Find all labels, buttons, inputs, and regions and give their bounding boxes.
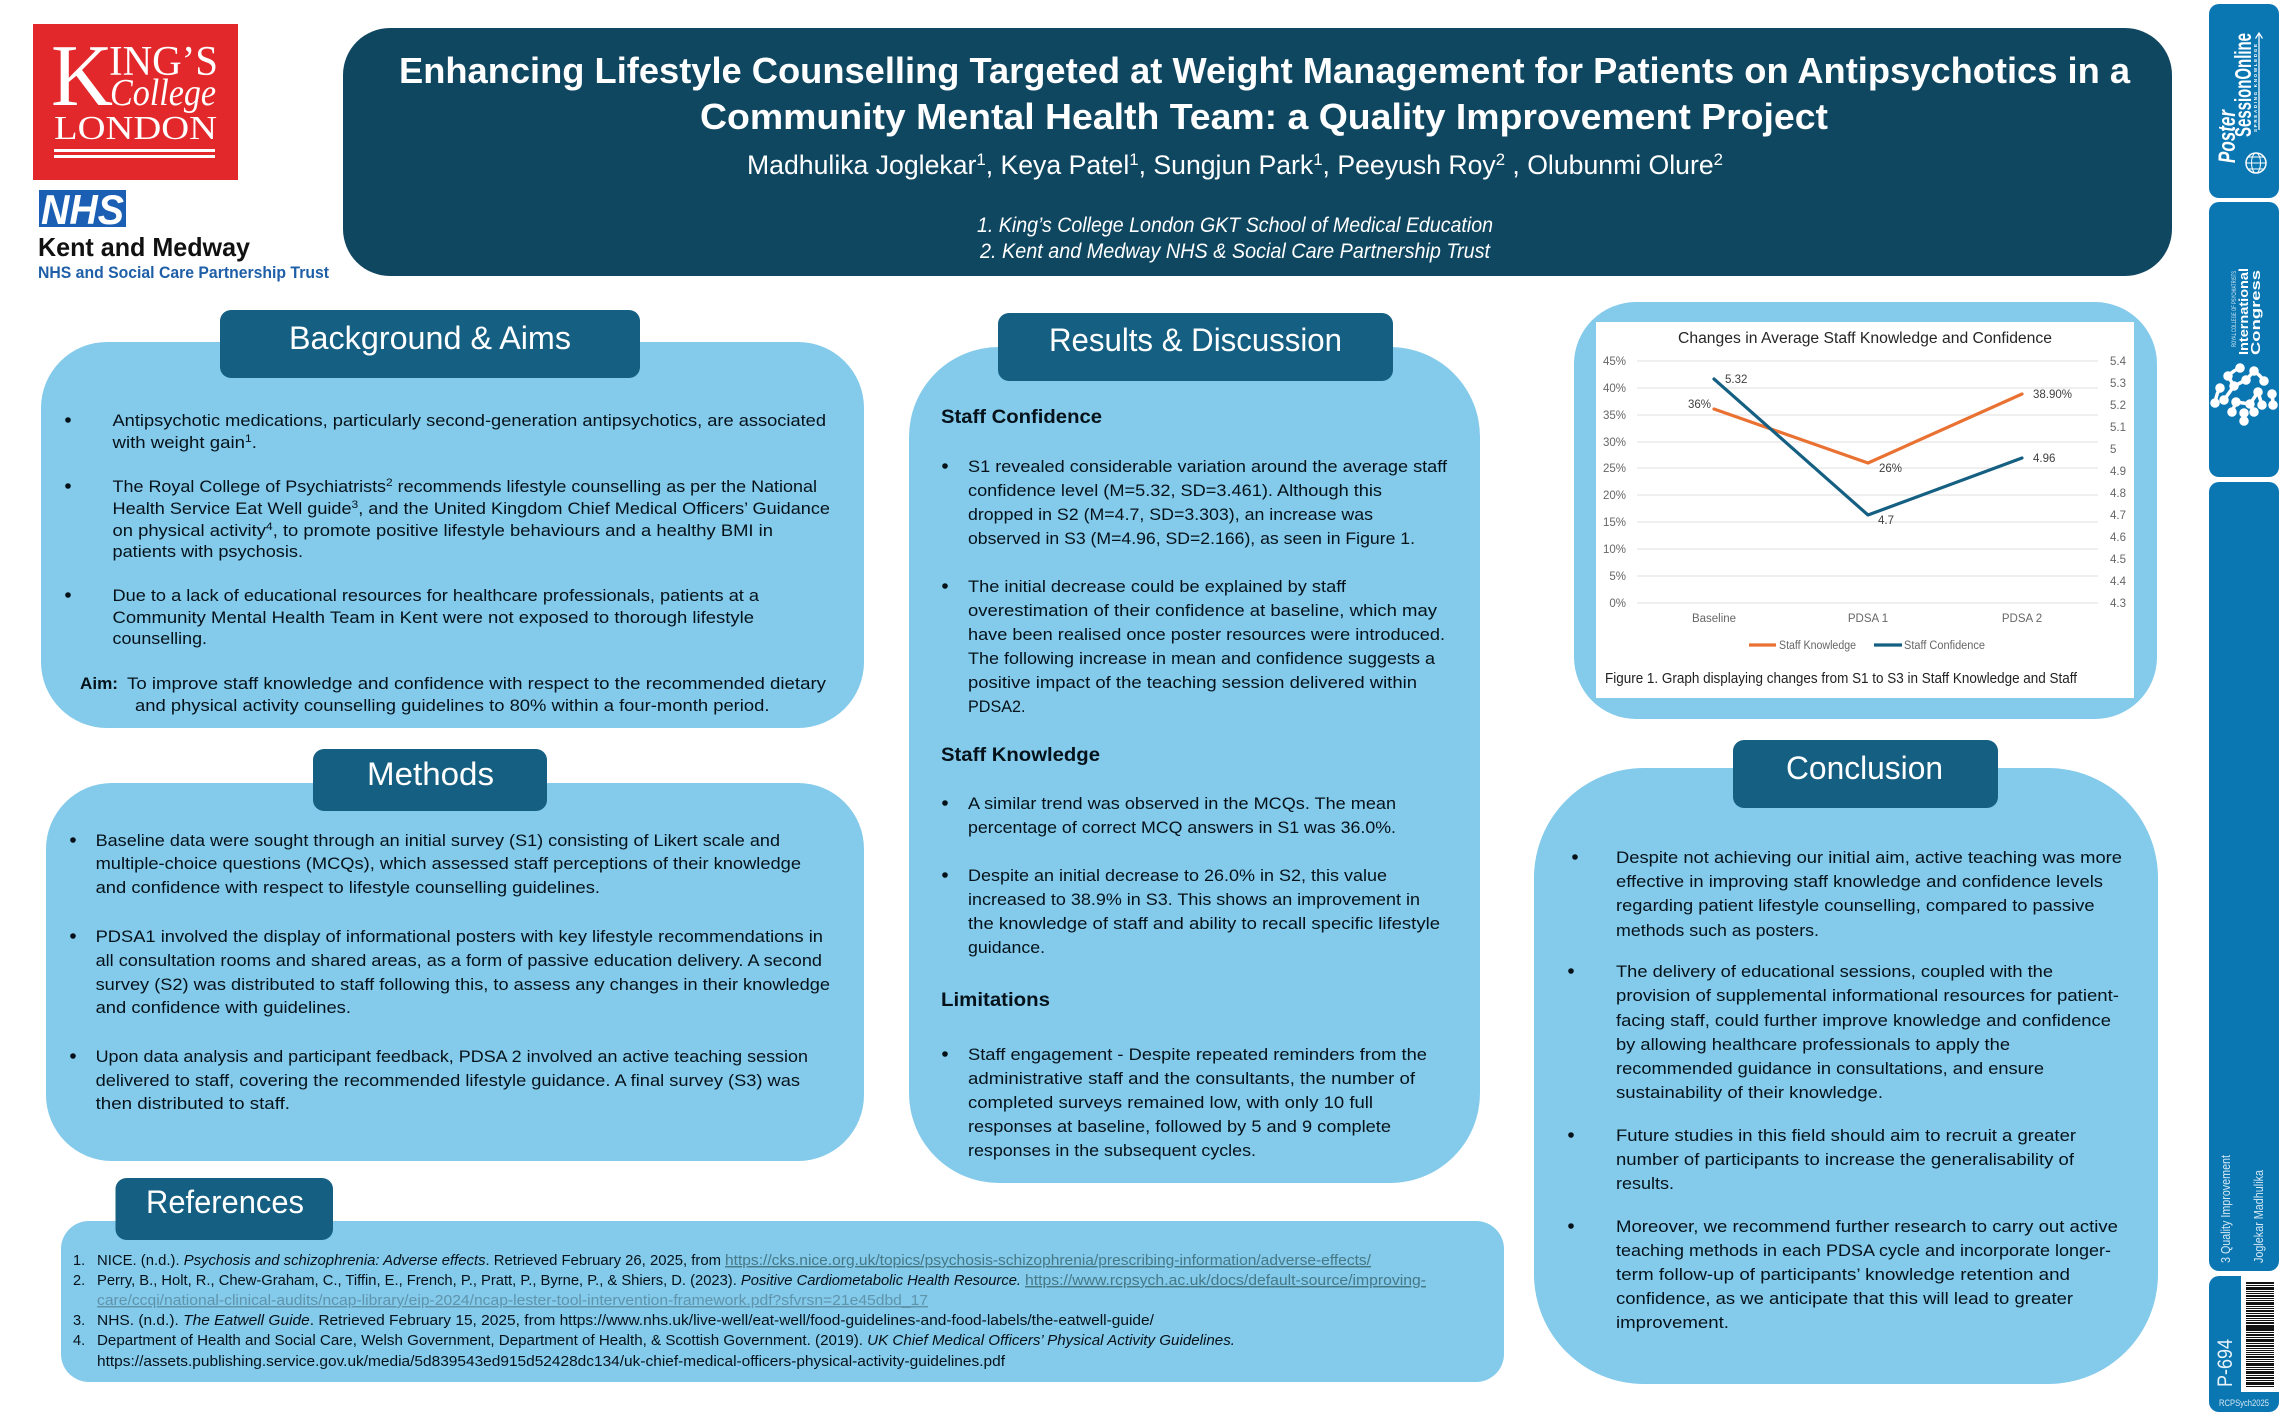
bullet: initial decrease: The initial decrease could be explained by staff (968, 577, 1346, 596)
right axis labels: 5.2 (2110, 400, 2126, 412)
bullet: further research: Moreover, we recommend further research to carry out active (1616, 1217, 2118, 1236)
bullet: knowledge increase: the knowledge of staff and ability to recall specific lifestyle (968, 914, 1440, 933)
bullet: staff engagement: completed surveys remained low, with only 10 full (968, 1093, 1373, 1112)
heading: Results & Discussion: Results & Discussion (1049, 322, 1342, 358)
bullet: weight gain: Antipsychotic medications, particularly second-generation antipsychotics, are associated (112, 411, 826, 430)
sidebar (2209, 4, 2283, 1412)
bullet: initial decrease: The following increase in mean and confidence suggests a (968, 649, 1436, 668)
sidebar: poster ID and barcode: RCPSych2025 (2219, 1398, 2269, 1409)
right axis labels: 4.3 (2110, 598, 2126, 610)
bullet: knowledge increase: guidance. (968, 938, 1045, 957)
authors: Madhulika Joglekar (747, 150, 980, 180)
poster title: Community Mental Health Team: a Quality Improvement Project (700, 96, 1828, 137)
heading: References: References (146, 1184, 304, 1220)
line chart (1603, 356, 2127, 652)
bullet: lack of resources: counselling. (112, 629, 207, 648)
heading: Background & Aims: Background & Aims (289, 320, 571, 356)
bullet: further research: improvement. (1616, 1313, 1729, 1332)
bullet: active teaching: Despite not achieving our initial aim, active teaching was more (1616, 848, 2122, 867)
bullet: guidance: , to promote positive lifestyle behaviours and a healthy BMI in (273, 521, 773, 540)
right axis labels: 4.9 (2110, 466, 2126, 478)
panel: Conclusion (1534, 740, 2158, 1384)
bullet: further research: teaching methods in each PDSA cycle and incorporate longer- (1616, 1241, 2111, 1260)
sidebar: International Congress: Congress (2249, 270, 2263, 355)
bullet: initial decrease (942, 577, 1445, 716)
authors: 2 (1714, 150, 1723, 169)
bullet: S1 variation: dropped in S2 (M=4.7, SD=3.303), an increase was (968, 505, 1373, 524)
bullet: future studies: results. (1616, 1174, 1674, 1193)
right axis labels: 4.7 (2110, 510, 2126, 522)
bullet: PDSA 2: delivered to staff, covering the recommended lifestyle guidance. A final survey (S3) was (96, 1071, 800, 1090)
heading: Results & Discussion (998, 313, 1393, 381)
bullet: staff engagement: responses in the subsequent cycles. (968, 1141, 1256, 1160)
barcode (2246, 1282, 2274, 1387)
right axis labels: 5.3 (2110, 378, 2126, 390)
affiliations (977, 214, 1493, 263)
authors: , Olubunmi Olure (1505, 150, 1714, 180)
data labels: 26% (1879, 463, 1902, 475)
reference list: NHS. (n.d.). The Eatwell Guide . Retrieved February 15, 2025, from https://www.nhs.uk/live-well/eat-well/food-guidelines-and-food-labels/the-eatwell-guide/ (97, 1313, 1155, 1329)
data labels: 5.32 (1725, 374, 1747, 386)
authors: , Sungjun Park (1139, 150, 1314, 180)
left axis labels: 45% (1603, 356, 1626, 368)
heading: Conclusion (1733, 740, 1998, 808)
panel: References (61, 1178, 1504, 1382)
bullet: guidance: The Royal College of Psychiatrists (112, 477, 365, 496)
left axis labels: 5% (1609, 571, 1626, 583)
category labels: Baseline (1692, 613, 1736, 625)
left axis labels: 35% (1603, 410, 1626, 422)
bullet: weight gain: with weight gain (112, 433, 231, 452)
bullet: staff engagement: responses at baseline, followed by 5 and 9 complete (968, 1117, 1391, 1136)
bullet: MCQ trend (942, 794, 1396, 837)
reference list: 4. (73, 1333, 85, 1349)
logo: King's College London: K (51, 28, 113, 125)
poster title: Enhancing Lifestyle Counselling Targeted at Weight Management for Patients on Antipsychotics in a (399, 50, 2131, 91)
icon: brain network (2212, 365, 2276, 424)
aim statement: and physical activity counselling guidelines to 80% within a four-month period. (135, 696, 770, 715)
sidebar: International Congress: ROYAL COLLEGE OF PSYCHIATRISTS (2231, 271, 2238, 347)
bullet: further research: term follow-up of participants’ knowledge retention and (1616, 1265, 2070, 1284)
bullet: PDSA1: PDSA1 involved the display of informational posters with key lifestyle recommendations in (96, 927, 823, 946)
bullet: baseline survey: multiple-choice questions (MCQs), which assessed staff perceptions of their knowledge (96, 854, 801, 873)
bullet: initial decrease: positive impact of the teaching session delivered within (968, 673, 1417, 692)
bullet: S1 variation: observed in S3 (M=4.96, SD=2.166), as seen in Figure 1. (968, 529, 1415, 548)
bullet: knowledge increase: Despite an initial decrease to 26.0% in S2, this value (968, 866, 1387, 885)
right axis labels: 4.8 (2110, 488, 2126, 500)
subheading: Staff Knowledge: Staff Knowledge (941, 745, 1100, 766)
bullet: guidance: 2 (386, 477, 393, 489)
bullet: MCQ trend: percentage of correct MCQ answers in S1 was 36.0%. (968, 818, 1396, 837)
legend: Staff Confidence (1904, 640, 1985, 652)
bullet: baseline survey (70, 831, 801, 897)
panel: Methods (46, 749, 864, 1161)
logo: NHS Kent and Medway (38, 186, 329, 282)
left axis labels: 10% (1603, 544, 1626, 556)
left axis labels (1603, 356, 1626, 610)
left axis labels: 20% (1603, 490, 1626, 502)
aim statement (80, 674, 827, 715)
sidebar: poster ID and barcode: P-694 (2214, 1339, 2237, 1387)
sidebar: Poster Session Online (2209, 4, 2279, 198)
series: staff knowledge (1714, 394, 2022, 463)
left axis labels: 30% (1603, 437, 1626, 449)
bullet: PDSA 2 (70, 1047, 808, 1113)
bullet: further research (1568, 1217, 2118, 1332)
bullet: active teaching: regarding patient lifestyle counselling, compared to passive (1616, 896, 2094, 915)
bullet: weight gain: . (252, 433, 257, 452)
data labels: 4.7 (1878, 515, 1894, 527)
affiliations: 1. King’s College London GKT School of Medical Education (977, 214, 1493, 237)
left axis labels: 25% (1603, 463, 1626, 475)
logo: King's College London: ING’S (109, 39, 218, 85)
category labels: PDSA 2 (2002, 613, 2042, 625)
data labels: 4.96 (2033, 453, 2055, 465)
bullet: PDSA 2: Upon data analysis and participant feedback, PDSA 2 involved an active teaching session (96, 1047, 808, 1066)
right axis labels: 5 (2110, 444, 2116, 456)
authors: 1 (1129, 150, 1139, 169)
panel: chart card (1574, 302, 2157, 719)
logo: NHS Kent and Medway: NHS and Social Care Partnership Trust (38, 263, 329, 282)
bullet: active teaching: effective in improving staff knowledge and confidence levels (1616, 872, 2103, 891)
sidebar: poster ID and barcode (2209, 1276, 2283, 1412)
left axis labels: 40% (1603, 383, 1626, 395)
left axis labels: 15% (1603, 517, 1626, 529)
affiliations: 2. Kent and Medway NHS & Social Care Partnership Trust (979, 240, 1491, 263)
authors: 2 (1496, 150, 1505, 169)
reference list: https://assets.publishing.service.gov.uk/media/5d839543ed915d52428dc134/uk-chief-medical-officers-physical-activity-guidelines.pdf (97, 1354, 1006, 1370)
bullet: lack of resources: Due to a lack of educational resources for healthcare professionals, patients at a (112, 586, 760, 605)
reference list: Department of Health and Social Care, Welsh Government, Department of Health, & Scottish Government. (2019). UK Chief Medical Officers’ Physical Activity Guidelines. (97, 1333, 1235, 1349)
logo: King's College London: LONDON (54, 110, 217, 147)
bullet: educational sessions: by allowing healthcare professionals to apply the (1616, 1035, 2010, 1054)
bullet: guidance (65, 477, 830, 561)
bullet: guidance: patients with psychosis. (112, 542, 303, 561)
sidebar: Poster Session Online: Poster (2214, 109, 2241, 163)
right axis labels: 4.5 (2110, 554, 2126, 566)
sidebar: topic and author: Joglekar Madhulika (2252, 1170, 2266, 1263)
bullet: future studies (1568, 1126, 2077, 1193)
panel: Background & Aims (41, 310, 864, 728)
reference list: 3. (73, 1313, 85, 1329)
heading: Conclusion: Conclusion (1786, 750, 1943, 786)
category labels (1692, 613, 2042, 625)
bullet: initial decrease: PDSA2. (968, 697, 1026, 716)
bullet: staff engagement: Staff engagement - Despite repeated reminders from the (968, 1045, 1427, 1064)
bullet: educational sessions: facing staff, could further improve knowledge and confidence (1616, 1011, 2111, 1030)
bullet: initial decrease: have been realised once poster resources were introduced. (968, 625, 1445, 644)
right axis labels: 4.4 (2110, 576, 2127, 588)
subheading: Staff Confidence: Staff Confidence (941, 407, 1102, 428)
bullet: lack of resources (65, 586, 760, 648)
bullet: MCQ trend: A similar trend was observed in the MCQs. The mean (968, 794, 1396, 813)
bullet: PDSA1: all consultation rooms and shared areas, as a form of passive education delivery. A second (96, 951, 822, 970)
bullet: educational sessions (1568, 962, 2119, 1102)
bullet: future studies: Future studies in this field should aim to recruit a greater (1616, 1126, 2077, 1145)
series: staff confidence (1714, 379, 2022, 515)
title banner (343, 28, 2172, 276)
bullet: educational sessions: provision of supplemental informational resources for patient- (1616, 986, 2119, 1005)
aim statement: To improve staff knowledge and confidence with respect to the recommended dietary (127, 674, 827, 693)
sidebar: International Congress: International (2237, 268, 2251, 355)
bullet: PDSA1: survey (S2) was distributed to staff following this, to assess any changes in their knowledge (96, 975, 830, 994)
bullet: weight gain (65, 411, 826, 452)
bullet: active teaching (1572, 848, 2122, 940)
left axis labels: 0% (1609, 598, 1626, 610)
reference list: 2. (73, 1273, 85, 1289)
bullet: guidance: 3 (352, 499, 358, 511)
reference list: Perry, B., Holt, R., Chew-Graham, C., Tiffin, E., French, P., Pratt, P., Byrne, P., & Shiers, D. (2023). Positive Cardiometabolic Health Resource. (97, 1273, 1021, 1289)
bullet: initial decrease: overestimation of their confidence at baseline, which may (968, 601, 1438, 620)
data labels: 36% (1688, 399, 1711, 411)
bullet: guidance: , and the United Kingdom Chief Medical Officers’ Guidance (358, 499, 830, 518)
bullet: lack of resources: Community Mental Health Team in Kent were not exposed to thorough lifestyle (112, 608, 754, 627)
bullet: guidance: on physical activity (112, 521, 251, 540)
bullet: knowledge increase: increased to 38.9% in S3. This shows an improvement in (968, 890, 1420, 909)
bullet: guidance: 4 (266, 521, 273, 533)
authors: , Peeyush Roy (1323, 150, 1496, 180)
authors: 1 (976, 150, 986, 169)
bullet: staff engagement: administrative staff and the consultants, the number of (968, 1069, 1415, 1088)
poster title (399, 50, 2131, 137)
chart title: Changes in Average Staff Knowledge and Confidence (1678, 330, 2052, 347)
reference list (73, 1253, 1426, 1370)
figure caption: Figure 1. Graph displaying changes from S1 to S3 in Staff Knowledge and Staff (1605, 671, 2078, 687)
panel: Results & Discussion (909, 313, 1480, 1183)
heading: Methods (313, 749, 547, 811)
bullet: weight gain: 1 (245, 433, 252, 445)
bullet: active teaching: methods such as posters. (1616, 921, 1819, 940)
sidebar: International Congress (2209, 202, 2279, 477)
heading: Methods: Methods (367, 756, 494, 792)
sidebar: topic and author: 3 Quality Improvement (2219, 1155, 2233, 1263)
bullet: S1 variation (942, 457, 1447, 548)
bullet: educational sessions: sustainability of their knowledge. (1616, 1083, 1883, 1102)
right axis labels: 5.4 (2110, 356, 2127, 368)
reference list: NICE. (n.d.). Psychosis and schizophrenia: Adverse effects . Retrieved February 26, 2025, from (97, 1253, 721, 1269)
bullet: baseline survey: Baseline data were sought through an initial survey (S1) consisting of Likert scale and (96, 831, 780, 850)
data labels (1688, 374, 2072, 527)
bullet: knowledge increase (942, 866, 1440, 957)
legend (1749, 640, 1985, 652)
logo: NHS Kent and Medway: NHS (41, 186, 124, 233)
heading: References (116, 1178, 333, 1240)
reference list: care/ccqi/national-clinical-audits/ncap-library/eip-2024/ncap-lester-tool-intervention-framework.pdf?sfvrsn=21e45dbd_17 (97, 1293, 928, 1309)
right axis labels: 4.6 (2110, 532, 2126, 544)
bullet: PDSA 2: then distributed to staff. (96, 1094, 290, 1113)
sidebar: Poster Session Online: SPREADING KNOWLEDGE (2253, 44, 2258, 132)
reference list: https://cks.nice.org.uk/topics/psychosis-schizophrenia/prescribing-information/adverse-effects/ (725, 1253, 1372, 1269)
aim statement: Aim: (80, 674, 118, 693)
bullet: PDSA1 (70, 927, 830, 1017)
bullet: educational sessions: The delivery of educational sessions, coupled with the (1616, 962, 2053, 981)
figure image background (1596, 322, 2134, 698)
authors: , Keya Patel (986, 150, 1129, 180)
logo: King's College London: College (110, 72, 216, 114)
authors: 1 (1313, 150, 1323, 169)
reference list: 1. (73, 1253, 85, 1269)
right axis labels (2110, 356, 2127, 610)
bullet: guidance: Health Service Eat Well guide (112, 499, 332, 518)
bullet: S1 variation: confidence level (M=5.32, SD=3.461). Although this (968, 481, 1382, 500)
bullet: baseline survey: and confidence with respect to lifestyle counselling guidelines. (96, 878, 600, 897)
bullet: educational sessions: recommended guidance in consultations, and ensure (1616, 1059, 2044, 1078)
heading: Background & Aims (220, 310, 640, 378)
bullet: guidance: recommends lifestyle counselling as per the National (393, 477, 817, 496)
bullet: future studies: number of participants to increase the generalisability of (1616, 1150, 2074, 1169)
data labels: 38.90% (2033, 389, 2072, 401)
legend: Staff Knowledge (1779, 640, 1856, 652)
bullet: further research: confidence, as we anticipate that this will lead to greater (1616, 1289, 2074, 1308)
logo: King's College London (33, 24, 238, 180)
right axis labels: 5.1 (2110, 422, 2126, 434)
logo: NHS Kent and Medway: Kent and Medway (38, 232, 251, 262)
category labels: PDSA 1 (1848, 613, 1888, 625)
bullet: PDSA1: and confidence with guidelines. (96, 998, 351, 1017)
bullet: S1 variation: S1 revealed considerable variation around the average staff (968, 457, 1447, 476)
bullet: staff engagement (942, 1045, 1427, 1160)
subheading: Limitations: Limitations (941, 990, 1050, 1011)
reference list: https://www.rcpsych.ac.uk/docs/default-source/improving- (1025, 1273, 1426, 1289)
sidebar: topic and author (2209, 482, 2279, 1271)
